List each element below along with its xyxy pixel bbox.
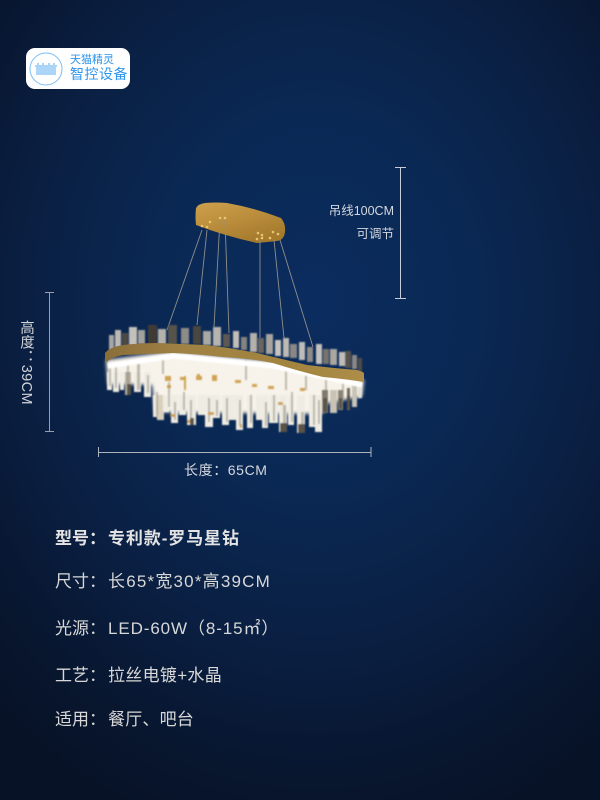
height dimension xyxy=(45,292,54,432)
canopy xyxy=(196,202,285,243)
spec: usage xyxy=(55,710,194,729)
length dimension xyxy=(98,447,372,457)
lower crystals xyxy=(107,356,362,433)
spec: light source: 光源： xyxy=(55,619,106,638)
spec: craft: 拉丝电镀+水晶 xyxy=(108,666,222,685)
spec: usage: 适用： xyxy=(55,710,106,729)
under-band highlight xyxy=(108,356,362,385)
spec: craft: 工艺： xyxy=(55,666,106,685)
spec: model: 专利款-罗马星钻 xyxy=(108,529,240,548)
crystal dark tips xyxy=(127,384,350,433)
spec: model: 型号： xyxy=(55,529,106,548)
badge: smart control device xyxy=(26,48,130,89)
crystal gold flecks xyxy=(165,374,305,428)
gold band xyxy=(105,343,364,382)
spec: usage: 餐厅、吧台 xyxy=(108,710,194,729)
crystal streaks xyxy=(109,360,344,432)
spec: light source: LED-60W（8-15㎡） xyxy=(108,619,279,638)
upper crystals xyxy=(109,325,362,371)
hanging wire dimension xyxy=(395,167,406,299)
spec: size: 尺寸： xyxy=(55,572,106,591)
icon: chandelier in circle xyxy=(30,52,62,86)
suspension wires xyxy=(167,220,313,347)
adjustable label: 可调节 xyxy=(356,227,394,241)
badge line 1: 天猫精灵 xyxy=(70,54,114,66)
spec: size: 长65*宽30*高39CM xyxy=(108,572,271,591)
hanging wire label: 吊线100CM xyxy=(329,204,394,218)
crystal glow xyxy=(106,351,364,414)
length label: 长度：65CM xyxy=(184,462,268,478)
height label: 高度：39CM xyxy=(18,320,34,405)
badge line 2: 智控设备 xyxy=(70,66,128,82)
spec: craft xyxy=(55,666,222,685)
